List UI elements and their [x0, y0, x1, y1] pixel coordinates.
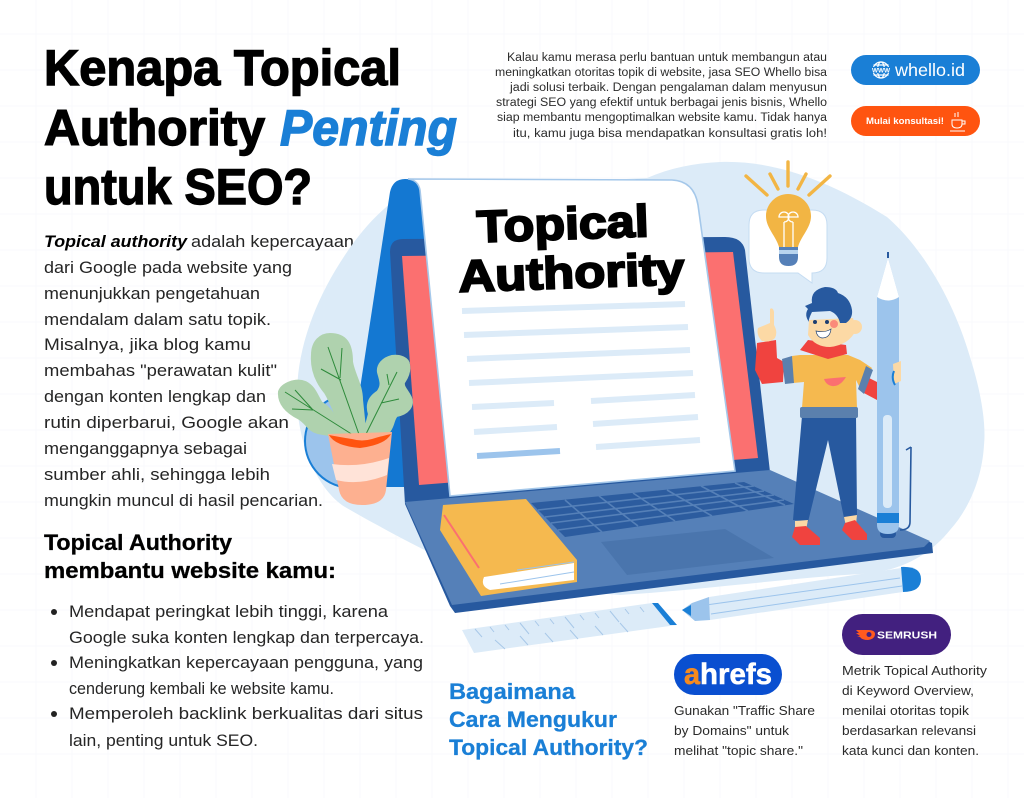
bullet list — [51, 603, 424, 750]
hood — [800, 340, 847, 359]
ahrefs description: melihat "topic share." — [674, 743, 803, 758]
bullet list: lain, penting untuk SEO. — [69, 732, 258, 750]
body paragraph: adalah kepercayaan — [191, 233, 354, 251]
logo: ahrefs — [674, 654, 782, 695]
laptop stand circle — [305, 394, 399, 488]
shoes — [792, 526, 820, 545]
trackpad — [601, 529, 774, 575]
icon: light bulb in speech bubble — [746, 162, 830, 283]
illustration: lying pencil — [682, 567, 921, 621]
illustration: character — [755, 287, 901, 545]
bullet list: Google suka konten lengkap dan terpercaya. — [69, 629, 424, 647]
hair — [805, 287, 852, 323]
semrush description: Metrik Topical Authority — [842, 663, 988, 678]
background blob — [297, 162, 984, 595]
heading: bagaimana cara mengukur: Bagaimana — [449, 679, 576, 704]
heading: bagaimana cara mengukur: Cara Mengukur — [449, 707, 617, 732]
title — [44, 40, 457, 215]
logo: semrush — [842, 614, 951, 655]
subheading: membantu website kamu: — [44, 558, 336, 583]
ahrefs description: by Domains" untuk — [674, 723, 790, 738]
laptop screen frame — [390, 237, 770, 504]
intro text block: strategi SEO yang efektif untuk berbagai jenis bisnis, Whello — [496, 97, 827, 109]
hand and finger — [758, 308, 776, 342]
logo: ahrefs: a — [684, 658, 700, 691]
button: whello.id — [851, 55, 980, 85]
illustration: big pencil — [877, 252, 911, 538]
body paragraph: dari Google pada website yang — [44, 259, 292, 277]
legs — [793, 416, 857, 522]
red sleeves — [755, 340, 784, 384]
ahrefs description: Gunakan "Traffic Share — [674, 703, 815, 718]
title: Kenapa Topical — [44, 40, 401, 96]
body paragraph: mendalam dalam satu topik. — [44, 311, 271, 329]
illustration: laptop — [305, 179, 933, 613]
intro text block: itu, kamu juga bisa mendapatkan konsultasi gratis loh! — [513, 128, 827, 140]
title: untuk SEO? — [44, 159, 312, 215]
book — [440, 499, 577, 596]
title: Penting — [280, 100, 457, 156]
bullet list: cenderung kembali ke website kamu. — [69, 680, 334, 698]
subheading: Topical Authority — [44, 530, 233, 555]
semrush description: berdasarkan relevansi — [842, 723, 976, 738]
laptop back panel — [345, 179, 460, 487]
body paragraph: mungkin muncul di hasil pencarian. — [44, 492, 323, 510]
paper heading: Topical — [476, 195, 649, 252]
socks — [795, 515, 857, 530]
bullet list: Meningkatkan kepercayaan pengguna, yang — [69, 654, 423, 672]
intro text block: meningkatkan otoritas topik di website, jasa SEO Whello bisa — [495, 67, 828, 79]
body paragraph: Misalnya, jika blog kamu — [44, 336, 251, 354]
heading: bagaimana cara mengukur: Topical Authority? — [449, 735, 648, 760]
intro text block: Kalau kamu merasa perlu bantuan untuk membangun atau — [507, 52, 827, 64]
logo: ahrefs: hrefs — [700, 658, 772, 691]
heading: bagaimana cara mengukur — [449, 679, 648, 760]
illustration: ruler — [462, 603, 677, 653]
body paragraph: Topical authority — [44, 233, 188, 251]
body paragraph — [44, 233, 354, 510]
paper sheet — [408, 179, 735, 496]
ahrefs description — [674, 703, 815, 758]
intro text block: jadi solusi terbaik. Dengan pengalaman dalam menyusun — [509, 82, 827, 94]
logo: semrush: SEMRUSH — [877, 630, 937, 642]
body paragraph: menganggapnya sebagai — [44, 440, 247, 458]
head — [808, 318, 856, 347]
body paragraph: sumber ahli, sehingga lebih — [44, 466, 270, 484]
button: mulai konsultasi — [851, 106, 980, 136]
bullet list: Memperoleh backlink berkualitas dari situs — [69, 705, 423, 723]
subheading — [44, 530, 336, 583]
paper lines — [462, 304, 700, 456]
button: whello.id: WWW — [872, 68, 891, 74]
pot — [328, 432, 392, 505]
button: mulai konsultasi: Mulai konsultasi! — [866, 116, 944, 127]
semrush description: menilai otoritas topik — [842, 703, 970, 718]
sweater — [792, 355, 872, 408]
body paragraph: dengan konten lengkap dan — [44, 388, 266, 406]
leaves — [281, 336, 410, 438]
body paragraph: membahas "perawatan kulit" — [44, 362, 277, 380]
body paragraph: menunjukkan pengetahuan — [44, 285, 260, 303]
laptop screen — [402, 252, 758, 485]
keyboard — [531, 482, 794, 537]
title: Authority — [44, 100, 265, 156]
intro text block: siap membantu mengoptimalkan website kamu. Tidak hanya — [497, 112, 828, 124]
button: whello.id: whello.id — [894, 60, 965, 80]
paper heading — [456, 194, 685, 302]
leaf veins — [285, 347, 399, 440]
illustration: plant — [281, 336, 410, 505]
laptop base — [405, 472, 933, 613]
semrush description — [842, 663, 988, 758]
semrush description: kata kunci dan konten. — [842, 743, 979, 758]
intro text block — [495, 52, 828, 140]
body paragraph: rutin diperbarui, Google akan — [44, 414, 289, 432]
paper heading: Authority — [458, 243, 685, 302]
bullet list: Mendapat peringkat lebih tinggi, karena — [69, 603, 389, 621]
semrush description: di Keyword Overview, — [842, 683, 974, 698]
